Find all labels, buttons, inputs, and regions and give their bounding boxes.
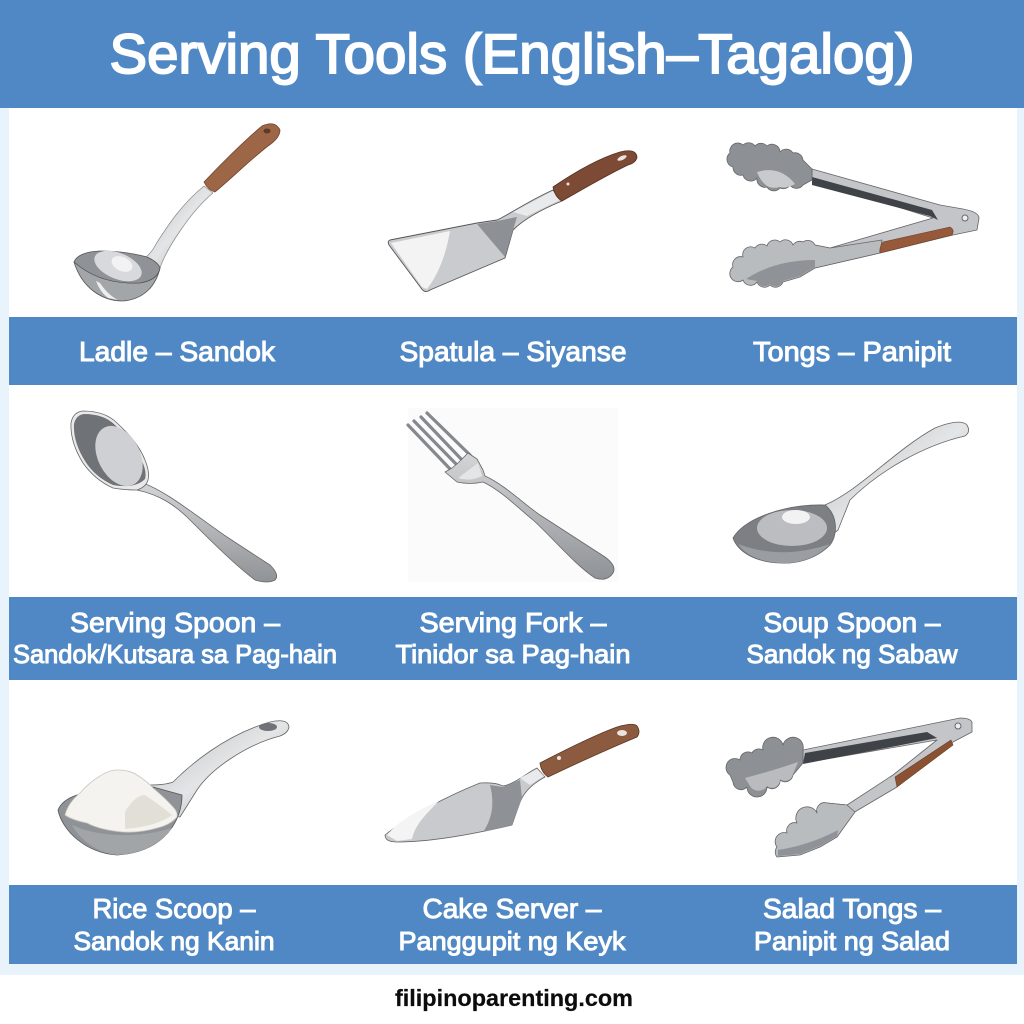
label bar row 3: Salad Tongs – <box>763 893 941 924</box>
icon: serving spoon <box>71 411 277 582</box>
icon: tongs <box>727 143 979 287</box>
label bar row 1: Spatula – Siyanse <box>400 336 626 367</box>
label bar row 1 <box>9 317 1017 385</box>
icon: rice scoop <box>58 721 289 855</box>
label bar row 2: Serving Spoon – <box>70 607 280 638</box>
footer website: filipinoparenting.com <box>395 985 633 1011</box>
icon: salad tongs <box>726 718 972 857</box>
label bar row 2: Sandok ng Sabaw <box>746 639 958 669</box>
icon: spatula <box>388 151 637 292</box>
label bar row 3: Panggupit ng Keyk <box>398 926 627 956</box>
icon: serving fork <box>408 413 614 579</box>
label bar row 3: Cake Server – <box>422 893 602 924</box>
icon: cake server <box>385 724 639 842</box>
label bar row 2: Tinidor sa Pag-hain <box>396 639 630 669</box>
label bar row 2: Sandok/Kutsara sa Pag-hain <box>13 639 337 669</box>
label bar row 2 <box>9 597 1017 680</box>
icon: soup spoon <box>733 422 969 563</box>
label bar row 3 <box>9 885 1017 964</box>
label bar row 3: Sandok ng Kanin <box>74 926 274 956</box>
title: Serving Tools (English–Tagalog) <box>110 22 915 85</box>
label bar row 1: Tongs – Panipit <box>753 336 951 367</box>
label bar row 1: Ladle – Sandok <box>79 336 276 367</box>
label bar row 3: Panipit ng Salad <box>754 926 950 956</box>
label bar row 2: Soup Spoon – <box>764 607 941 638</box>
label bar row 2: Serving Fork – <box>420 607 607 638</box>
icon: ladle <box>74 124 280 301</box>
title banner <box>0 0 1024 108</box>
label bar row 3: Rice Scoop – <box>92 893 256 924</box>
